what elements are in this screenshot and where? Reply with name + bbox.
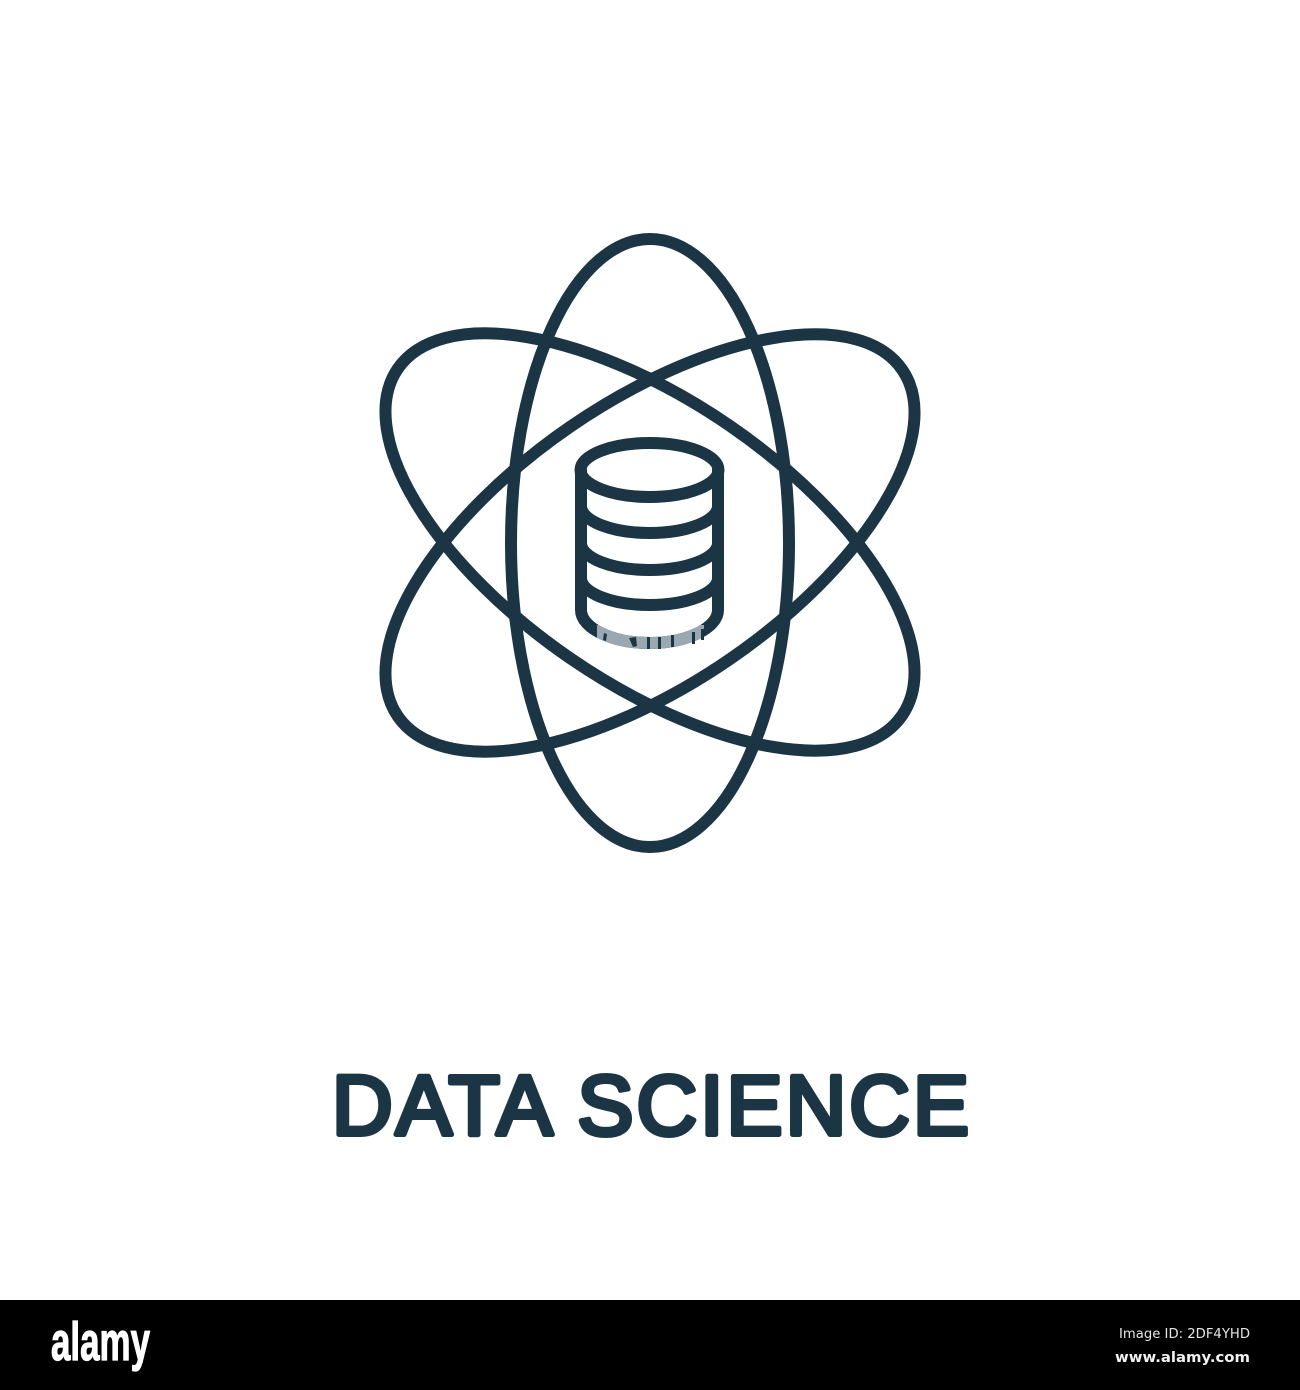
image id: Image ID: 2DF4YHD bbox=[1119, 1327, 1250, 1342]
website: www.alamy.com bbox=[1115, 1350, 1250, 1366]
watermark strip on cylinder bbox=[597, 625, 704, 649]
icon: database cylinder bbox=[580, 443, 718, 643]
icon: vertical orbit bbox=[511, 239, 789, 847]
icon: atom with database bbox=[318, 239, 982, 847]
logo: alamy: alamy bbox=[51, 1312, 150, 1372]
title: DATA SCIENCE bbox=[332, 1058, 969, 1152]
icon: orbit tilted right bbox=[318, 253, 982, 833]
footer bar bbox=[0, 1300, 1300, 1390]
icon: orbit tilted left bbox=[318, 252, 982, 832]
